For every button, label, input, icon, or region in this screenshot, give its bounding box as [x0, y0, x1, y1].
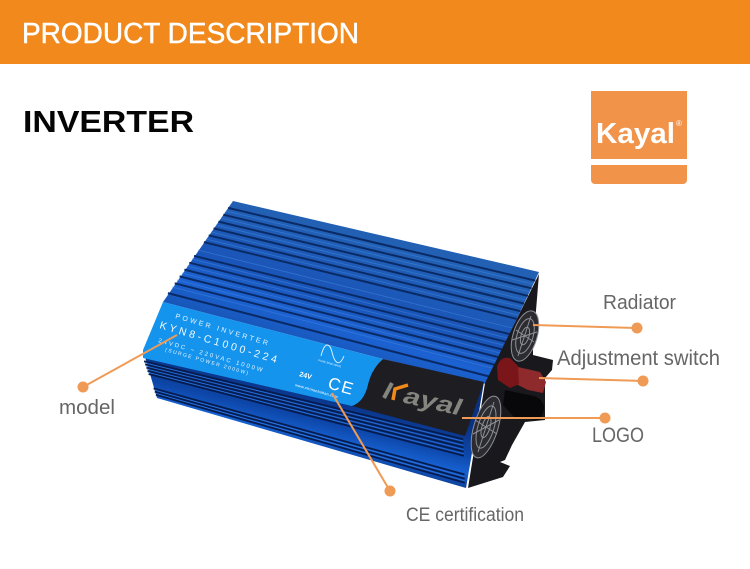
callout: Adjustment switch: Adjustment switch — [557, 347, 720, 370]
blue specification label: POWER INVERTER — [174, 313, 268, 347]
fan: upper — [506, 308, 544, 364]
inverter product — [143, 201, 553, 488]
blue specification label: 24V — [298, 371, 313, 381]
callout: LOGO — [462, 412, 644, 447]
blue specification label — [143, 302, 383, 406]
mounting plate — [468, 274, 553, 488]
red terminal — [497, 358, 546, 393]
title: INVERTER — [23, 104, 194, 139]
callout: Adjustment switch — [539, 347, 720, 386]
callout: model — [59, 335, 177, 419]
rear plate with fans — [465, 274, 553, 488]
header banner: PRODUCT DESCRIPTION — [22, 18, 359, 50]
callout: CE certification — [332, 393, 524, 526]
callout: model: model — [59, 397, 115, 419]
blue specification label: 24VDC ~ 220VAC 1000W — [157, 338, 263, 374]
callout: CE certification: CE certification — [406, 505, 524, 526]
brand logo — [591, 91, 687, 184]
blue specification label: CE — [326, 374, 357, 399]
front ribbed face — [143, 350, 484, 488]
brand logo: ® — [676, 119, 682, 128]
blue specification label: (SURGE POWER 2000W) — [164, 347, 249, 377]
blue specification label: www.chinachuhan.com — [294, 383, 338, 399]
brand logo: Kayal — [596, 118, 675, 150]
blue specification label: KYN8-C1000-224 — [158, 319, 279, 366]
callout: LOGO: LOGO — [592, 424, 644, 447]
callout: Radiator: Radiator — [603, 292, 676, 314]
black brand label: ayal — [399, 383, 467, 420]
top ribbed face — [163, 201, 539, 384]
callout: Radiator — [533, 292, 676, 334]
header banner — [0, 0, 750, 64]
blue specification label: PURE SINE WAVE — [318, 358, 342, 369]
black brand label — [352, 359, 484, 436]
black terminal — [503, 390, 544, 420]
icon: sine wave — [321, 345, 344, 363]
fan: lower — [465, 393, 507, 461]
